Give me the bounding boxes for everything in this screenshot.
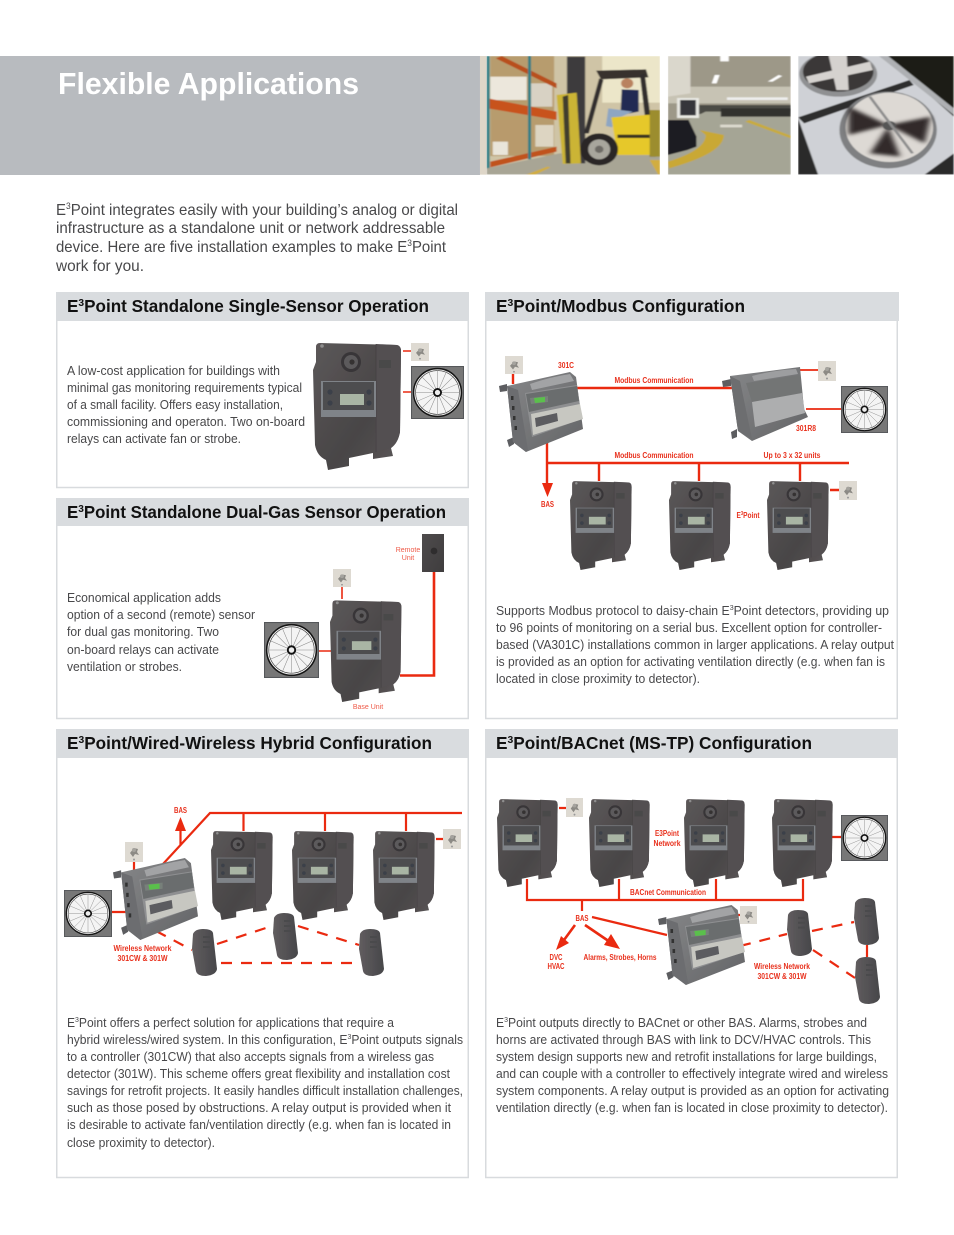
panel: wired-wireless hybrid <box>56 729 469 1178</box>
intro text: Point integrates easily with your building’s analog or digital <box>71 202 458 219</box>
banner background <box>0 56 480 175</box>
description: hybrid wireless/wired system. In this configuration, E <box>67 1032 368 1047</box>
intro text: 3 <box>407 238 412 248</box>
description <box>67 590 256 674</box>
panel: bacnet configuration <box>485 729 898 1178</box>
intro text: 3 <box>66 201 71 211</box>
description: E <box>496 1015 505 1030</box>
heading: Point/Wired-Wireless Hybrid Configuration <box>84 733 432 753</box>
diagram: hybrid network: 301CW & 301W <box>118 954 168 963</box>
intro text: work for you. <box>55 258 144 275</box>
description: minimal gas monitoring requirements typical <box>67 380 302 395</box>
description: Point outputs directly to BACnet or other BAS. Alarms, strobes and <box>508 1015 867 1030</box>
page header banner <box>0 51 954 175</box>
description: on-board relays can activate <box>67 642 219 657</box>
diagram: bacnet network: 301CW & 301W <box>758 972 807 981</box>
panel: modbus configuration <box>485 292 899 718</box>
description: and can couple with a controller to effectively integrate wired and wireless <box>496 1066 888 1081</box>
description: A low-cost application for buildings with <box>67 363 280 378</box>
heading: 3 <box>78 734 84 746</box>
description: 3 <box>730 603 734 612</box>
description: option of a second (remote) sensor <box>67 607 256 622</box>
intro text <box>55 201 458 275</box>
description: 3 <box>504 1015 508 1024</box>
photo: forklift in warehouse <box>480 51 954 175</box>
intro text: device. Here are five installation examples to make E <box>56 239 432 256</box>
heading: E <box>496 296 508 316</box>
description <box>496 1015 889 1115</box>
description: of a small facility. Offers easy installation, <box>67 397 283 412</box>
diagram: bacnet network: Alarms, Strobes, Horns <box>584 953 657 962</box>
description <box>496 603 894 686</box>
diagram: bacnet network: Wireless Network <box>754 962 810 971</box>
diagram: bacnet network <box>497 798 888 1004</box>
diagram: dual gas wiring: Base Unit <box>353 704 383 711</box>
diagram: bacnet network: BACnet Communication <box>630 888 706 897</box>
diagram: modbus network: BAS <box>541 500 555 509</box>
description: Point detectors, providing up <box>734 603 889 618</box>
description: system design supports new and retrofit installations for large buildings, <box>496 1049 877 1064</box>
heading: 3 <box>78 503 84 515</box>
diagram: modbus network: Up to 3 x 32 units <box>764 451 821 460</box>
diagram: bacnet network: DVC <box>550 953 563 962</box>
diagram: modbus network: 3 <box>741 511 743 517</box>
diagram: modbus network: 301R8 <box>796 424 816 433</box>
description: Point outputs signals <box>351 1032 463 1047</box>
diagram: modbus network: Modbus Communication <box>614 376 694 385</box>
panel: standalone single-sensor <box>56 292 469 488</box>
intro text: E <box>56 202 67 219</box>
diagram: dual gas wiring <box>264 534 444 711</box>
description: is desirable to activate fan/ventilation directly (e.g. when fan is located in <box>67 1117 451 1132</box>
heading: E <box>496 733 508 753</box>
intro text: infrastructure as a standalone unit or network addressable <box>56 220 445 237</box>
description: such as those posed by obstructions. A relay output is provided when it <box>67 1100 451 1115</box>
description: relays can activate fan or strobe. <box>67 431 241 446</box>
description: E <box>67 1015 76 1030</box>
diagram: modbus network: E <box>736 511 742 520</box>
diagram: modbus network <box>499 356 888 570</box>
panel: standalone dual-gas <box>56 498 469 718</box>
description: commissioning and operaton. Two on-board <box>67 414 305 429</box>
diagram: hybrid network: Wireless Network <box>114 944 172 953</box>
description: is provided as an option for activating ventilation directly (e.g. when fan is <box>496 654 885 669</box>
heading: Point Standalone Single-Sensor Operation <box>84 296 429 316</box>
diagram: modbus network: 301C <box>558 361 574 370</box>
intro text: Point <box>412 239 447 256</box>
description: to 96 points of monitoring on a serial bus. Excellent option for controller- <box>496 620 882 635</box>
description: system components. A relay output is provided as an option for activating <box>496 1083 889 1098</box>
description: 3 <box>75 1015 79 1024</box>
description: ventilation or strobes. <box>67 659 182 674</box>
diagram: bacnet network: E3Point <box>655 829 679 838</box>
diagram: dual gas wiring: Unit <box>402 555 414 562</box>
description: to a controller (301CW) that also accepts signals from a wireless gas <box>67 1049 434 1064</box>
description: horns are activated through BAS with link to DCV/HVAC controls. This <box>496 1032 871 1047</box>
description <box>67 1015 463 1150</box>
description: located in close proximity to detector). <box>496 671 700 686</box>
heading: E <box>67 733 79 753</box>
photo: rooftop fans <box>798 51 954 175</box>
description: close proximity to detector). <box>67 1135 215 1150</box>
diagram: hybrid network: BAS <box>174 806 188 815</box>
heading: 3 <box>508 734 513 746</box>
description: for dual gas monitoring. Two <box>67 624 219 639</box>
diagram: single sensor wiring <box>313 343 464 470</box>
description: savings for retrofit projects. It easily handles difficult installation challenges, <box>67 1083 463 1098</box>
diagram: bacnet network: BAS <box>576 914 589 923</box>
heading: E <box>67 502 79 522</box>
heading: 3 <box>78 297 84 309</box>
diagram: modbus network: Modbus Communication <box>614 451 694 460</box>
title: Flexible Applications <box>58 66 359 101</box>
description: based (VA301C) installations common in larger applications. A relay output <box>496 637 894 652</box>
description: Economical application adds <box>67 590 221 605</box>
description: 3 <box>347 1032 351 1041</box>
diagram: bacnet network: Network <box>654 839 681 848</box>
heading: E <box>67 296 79 316</box>
diagram: bacnet network: HVAC <box>548 962 565 971</box>
diagram: hybrid network <box>64 806 462 976</box>
diagram: modbus network: Point <box>743 511 760 520</box>
heading: Point/Modbus Configuration <box>513 296 745 316</box>
description: Point offers a perfect solution for applications that require a <box>79 1015 395 1030</box>
description: Supports Modbus protocol to daisy-chain E <box>496 603 744 618</box>
description: detector (301W). This scheme offers great flexibility and installation cost <box>67 1066 450 1081</box>
heading: 3 <box>508 297 513 309</box>
description <box>67 363 305 446</box>
heading: Point/BACnet (MS-TP) Configuration <box>513 733 812 753</box>
diagram: dual gas wiring: Remote <box>396 547 420 554</box>
description: ventilation directly (e.g. when fan is located in close proximity to detector). <box>496 1100 888 1115</box>
photo: parking garage <box>668 56 791 175</box>
heading: Point Standalone Dual-Gas Sensor Operation <box>84 502 446 522</box>
